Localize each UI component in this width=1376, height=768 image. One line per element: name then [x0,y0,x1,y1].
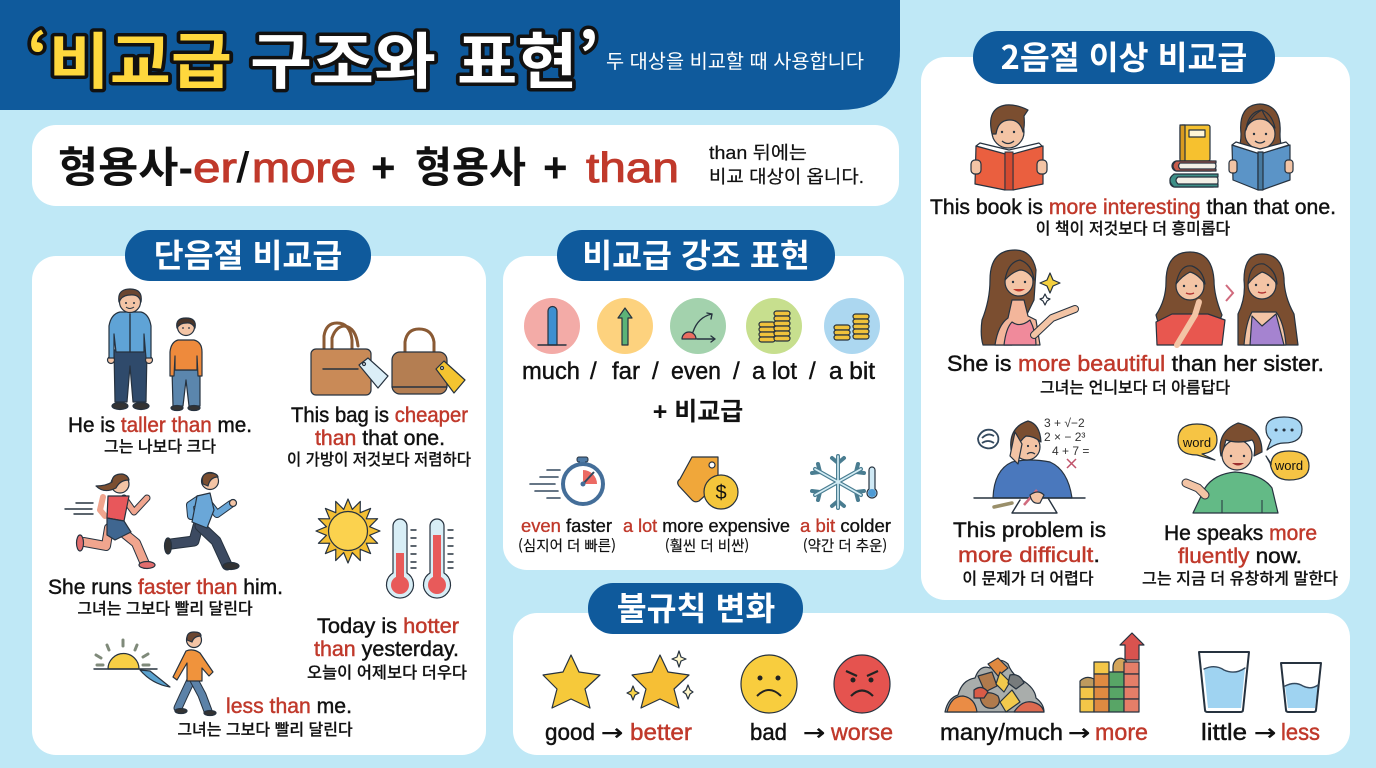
panel: 비교급 강조 표현 [503,230,904,570]
text: more fluently: He speaks more [1164,521,1317,545]
intensifier list: far [612,358,640,385]
plus comparative: + 비교급 [653,398,743,426]
panel: 단음절 비교급 [32,230,486,755]
text: more difficult: This problem is [953,518,1106,542]
text: taller [68,413,252,457]
text: more interesting: 이 책이 저것보다 더 흥미롭다 [1036,215,1231,239]
heading: 2음절 이상 비교급: 2음절 이상 비교급 [1001,32,1247,79]
label: good better: better [630,719,692,745]
label: bad worse [750,719,893,746]
text: more difficult [953,518,1106,589]
icon: bars and rising arrow [1080,633,1144,712]
label: many much more: → [1068,721,1090,746]
label: bad worse: → [803,721,825,746]
label: little less: → [1254,721,1276,746]
subtitle: 두 대상을 비교할 때 사용합니다 [606,51,864,73]
icon: woman compared with sister [1156,252,1298,345]
label: little less [1201,719,1320,746]
icon: student with math problem: 2 × − 2³ [1044,430,1085,444]
title [27,12,599,101]
label: good better: good [545,719,595,745]
icon: man speaking with bubbles [1178,417,1309,513]
heading: 단음절 비교급: 단음절 비교급 [154,230,342,277]
intensifier list: / [733,358,740,385]
icon: pile of blocks [945,658,1044,712]
icon: two bags with price tags [311,323,465,395]
icon: student with math problem: 4 + 7 = [1052,444,1089,458]
text: faster [48,575,283,619]
text: even faster: (심지어 더 빠른) [518,535,616,556]
icon: man speaking with bubbles: word [1182,435,1211,450]
text: hotter: 오늘이 어제보다 더우다 [307,659,467,683]
text: cheaper [287,403,471,470]
text: even faster: even faster [521,515,612,536]
icon: a lot [746,298,802,354]
title: 표현’ [457,12,599,101]
icon: student with math problem [974,416,1089,513]
text: a lot more expensive: (훨씬 더 비싼) [665,535,749,556]
formula: than [586,144,679,191]
text: taller: He is taller than me. [68,413,252,437]
text: less than: less than me. [226,694,352,718]
icon: small glass [1281,663,1321,712]
text: hotter: Today is hotter [317,614,459,638]
formula panel [32,125,899,206]
icon: a bit [824,298,880,354]
icon: sunrise and walking man [94,632,216,716]
text: faster: She runs faster than him. [48,575,283,599]
icon: angry face [834,655,890,713]
label: bad worse: worse [830,719,893,745]
text: more fluently: fluently now. [1178,544,1302,568]
formula: / [237,144,249,191]
text: taller: 그는 나보다 크다 [104,433,216,457]
label: good better [545,719,692,746]
heading: 불규칙 변화 [588,583,803,634]
text: a bit colder: a bit colder [800,515,891,536]
intensifier list: a lot [752,358,797,385]
icon: far [597,298,653,354]
text: a lot more expensive: a lot more expensive [623,515,790,536]
text: even faster [518,515,616,556]
icon: student with math problem: 3 + √−2 [1044,416,1085,430]
intensifier list: much [522,358,580,385]
text: a bit colder: (약간 더 추운) [803,535,887,556]
icon: sad face [741,655,797,713]
label: little less: less [1281,719,1320,745]
text: more fluently [1142,521,1338,589]
text: more difficult: more difficult . [958,543,1100,567]
title: 구조와 [250,12,436,101]
icon: man speaking with bubbles: word [1274,458,1303,473]
text: more difficult: 이 문제가 더 어렵다 [962,565,1094,589]
icon: boy reading red book [971,105,1047,190]
formula note: than 뒤에는 [709,143,807,163]
text: a bit colder [800,515,891,556]
label: good better: → [601,721,623,746]
icon: price tag and coin: $ [715,482,727,504]
formula [58,144,679,191]
intensifier list: a bit [829,358,875,385]
formula: + [543,144,568,191]
label: many much more: many/much [940,719,1063,745]
text: more beautiful: 그녀는 언니보다 더 아름답다 [1040,374,1230,398]
icon: two runners [65,472,239,570]
intensifier list [522,358,875,385]
formula: er [193,144,237,191]
icon: star good [543,655,600,708]
icon: star better [627,651,693,708]
label: bad worse: bad [750,719,787,745]
formula: 형용사 [415,144,526,191]
intensifier list: / [652,358,659,385]
text: less than [177,694,353,740]
text: cheaper: than that one. [315,426,445,450]
text: more beautiful [947,351,1324,398]
header banner [0,0,900,110]
icon: full glass [1199,652,1249,712]
heading: 비교급 강조 표현: 비교급 강조 표현 [582,230,810,277]
formula note: 비교 대상이 옵니다. [709,167,864,187]
intensifier list: / [809,358,816,385]
text: more fluently: 그는 지금 더 유창하게 말한다 [1142,565,1338,589]
label: little less: little [1201,719,1247,745]
icon: snowflake and thermometer [812,456,877,508]
formula note [709,143,864,187]
label: many much more [940,719,1148,746]
text: a lot more expensive [623,515,790,556]
panel: 불규칙 변화 [513,583,1350,755]
title: ‘비교급 [27,12,232,101]
text: more interesting: This book is more interesting than that one. [930,195,1336,219]
icon: sun and thermometers [316,499,453,598]
formula: more [252,144,356,191]
icon: tall man and short boy [108,289,202,410]
text: less than: 그녀는 그보다 빨리 달린다 [177,716,353,740]
icon: even [670,298,726,354]
icon: price tag and coin [678,457,738,509]
text: hotter: than yesterday. [314,637,459,661]
intensifier list: even [671,358,721,385]
icon: stopwatch [530,457,603,504]
formula: + [371,144,396,191]
text: cheaper: This bag is cheaper [291,403,468,427]
intensifier list: / [590,358,597,385]
text: more interesting [930,195,1336,239]
text: more beautiful: She is more beautiful than her sister. [947,351,1324,376]
text: cheaper: 이 가방이 저것보다 저렴하다 [287,446,471,470]
text: hotter [307,614,467,683]
panel: 2음절 이상 비교급 [921,31,1350,600]
formula: 형용사- [58,144,193,191]
icon: books and girl with blue book [1170,104,1293,190]
heading: 불규칙 변화: 불규칙 변화 [617,583,775,630]
text: faster: 그녀는 그보다 빨리 달린다 [77,595,253,619]
icon: much [524,298,580,354]
icon: woman with sparkles [981,250,1075,345]
label: many much more: more [1095,719,1148,745]
